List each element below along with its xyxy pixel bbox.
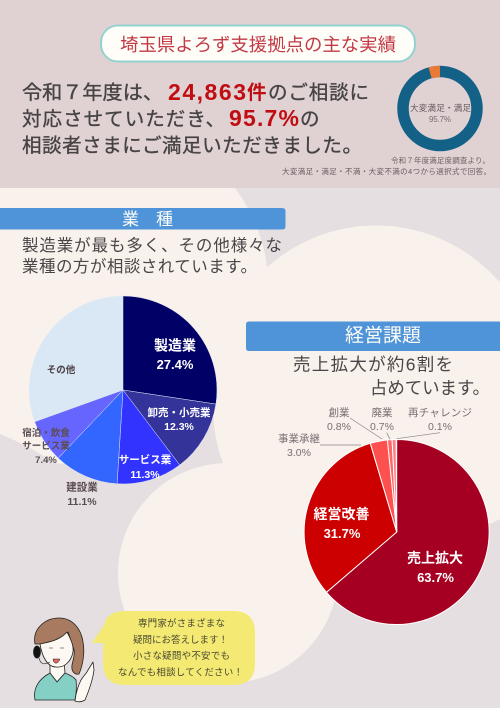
pie labels: industry: サービス業 [22, 440, 70, 452]
slice: lodging and food [35, 390, 123, 458]
pie labels: industry: その他 [47, 364, 76, 376]
pie labels: management issues: 売上拡大 [407, 550, 463, 566]
summary text: のご相談に [268, 82, 369, 104]
survey note: 大変満足・満足・不満・大変不満の4つから選択式で回答。 [282, 166, 491, 176]
heading: industry: 種 [156, 210, 173, 229]
pie labels: industry: 12.3% [164, 421, 195, 433]
slice: closure [392, 440, 397, 532]
slice: construction [58, 390, 123, 484]
small category labels with leader lines: 再チャレンジ [408, 407, 472, 419]
small category labels with leader lines: 0.1% [428, 421, 452, 433]
callout: speech bubble [92, 611, 255, 685]
summary text: の [300, 108, 320, 130]
summary text: 95.7% [229, 105, 299, 131]
text: industry summary: 製造業が最も多く、その他様々な [22, 236, 282, 255]
slice: manufacturing [123, 296, 217, 404]
pie labels: industry: 卸売・小売業 [148, 406, 211, 419]
summary text: 令和７年度は、 [22, 82, 163, 104]
title: 埼玉県よろず支援拠点の主な実績 [120, 34, 396, 55]
pie labels: industry [22, 338, 211, 508]
text: issues summary [293, 354, 490, 398]
slice: management improvement [304, 443, 397, 592]
pie labels: industry: 27.4% [157, 357, 194, 372]
pie labels: industry: 宿泊・飲食 [22, 427, 70, 439]
heading: management issues: 経営課題 [345, 324, 421, 346]
pie labels: industry: サービス業 [119, 453, 172, 466]
pie chart: management issues [304, 440, 489, 624]
heading: industry: 業 [122, 210, 139, 229]
pie labels: industry: 11.3% [130, 469, 160, 481]
pie labels: industry: 11.1% [67, 496, 97, 508]
small category labels with leader lines: 0.7% [370, 421, 394, 433]
text: industry summary [22, 236, 282, 276]
heading: management issues [246, 322, 500, 351]
pie labels: industry: 7.4% [35, 455, 57, 466]
slice: services [117, 390, 180, 484]
slice: other [29, 296, 123, 422]
slice: wholesale and retail [123, 390, 216, 465]
slice: startup [387, 440, 397, 532]
summary text [22, 79, 369, 157]
icon: body [35, 673, 76, 700]
panel: top summary band [0, 0, 500, 188]
donut chart: satisfaction [403, 72, 477, 146]
slice: sales expansion [326, 440, 489, 624]
callout: speech bubble: 疑問にお答えします！ [133, 634, 228, 646]
title [101, 26, 415, 62]
pie labels: industry: 製造業 [154, 338, 196, 354]
summary text: 対応させていただき、 [22, 108, 225, 130]
donut chart: satisfaction: 95.7% [429, 115, 451, 124]
icon: neck [50, 660, 65, 682]
pie labels: management issues: 31.7% [324, 526, 361, 541]
small category labels with leader lines: 0.8% [327, 421, 351, 433]
small category labels with leader lines: 創業 [328, 406, 350, 419]
summary text: 24,863 [168, 79, 246, 105]
icon: smile [49, 647, 64, 649]
callout: speech bubble: 専門家がさまざまな [138, 618, 225, 630]
pie labels: management issues [314, 506, 463, 585]
heading: industry [0, 208, 286, 230]
icon: raised hand [75, 662, 94, 702]
callout: speech bubble: 小さな疑問や不安でも [133, 651, 230, 662]
icon: face [40, 632, 73, 667]
summary text: 相談者さまにご満足いただきました。 [22, 135, 362, 157]
survey note [282, 155, 491, 176]
donut chart: satisfaction: 大変満足・満足 [410, 103, 471, 113]
pie labels: management issues: 63.7% [417, 570, 454, 585]
slice: succession [370, 440, 397, 532]
summary text: 件 [247, 82, 267, 104]
small category labels with leader lines: 事業承継 [278, 432, 320, 445]
icon: consultant woman [34, 618, 94, 702]
small category labels with leader lines [278, 406, 472, 459]
callout: speech bubble: なんでも相談してください！ [118, 666, 243, 678]
text: issues summary: 占めています。 [370, 378, 490, 398]
survey note: 令和７年度満足度調査より。 [391, 155, 490, 165]
icon: hair [35, 618, 84, 674]
pie labels: industry: 建設業 [66, 480, 98, 494]
text: issues summary: 売上拡大が約6割を [293, 354, 453, 374]
pie labels: management issues: 経営改善 [314, 506, 370, 522]
small category labels with leader lines: 廃業 [372, 406, 393, 419]
text: industry summary: 業種の方が相談されています。 [22, 257, 257, 276]
small category labels with leader lines: 3.0% [287, 447, 311, 459]
pie chart: industry [29, 296, 217, 484]
icon: headset [34, 646, 40, 658]
